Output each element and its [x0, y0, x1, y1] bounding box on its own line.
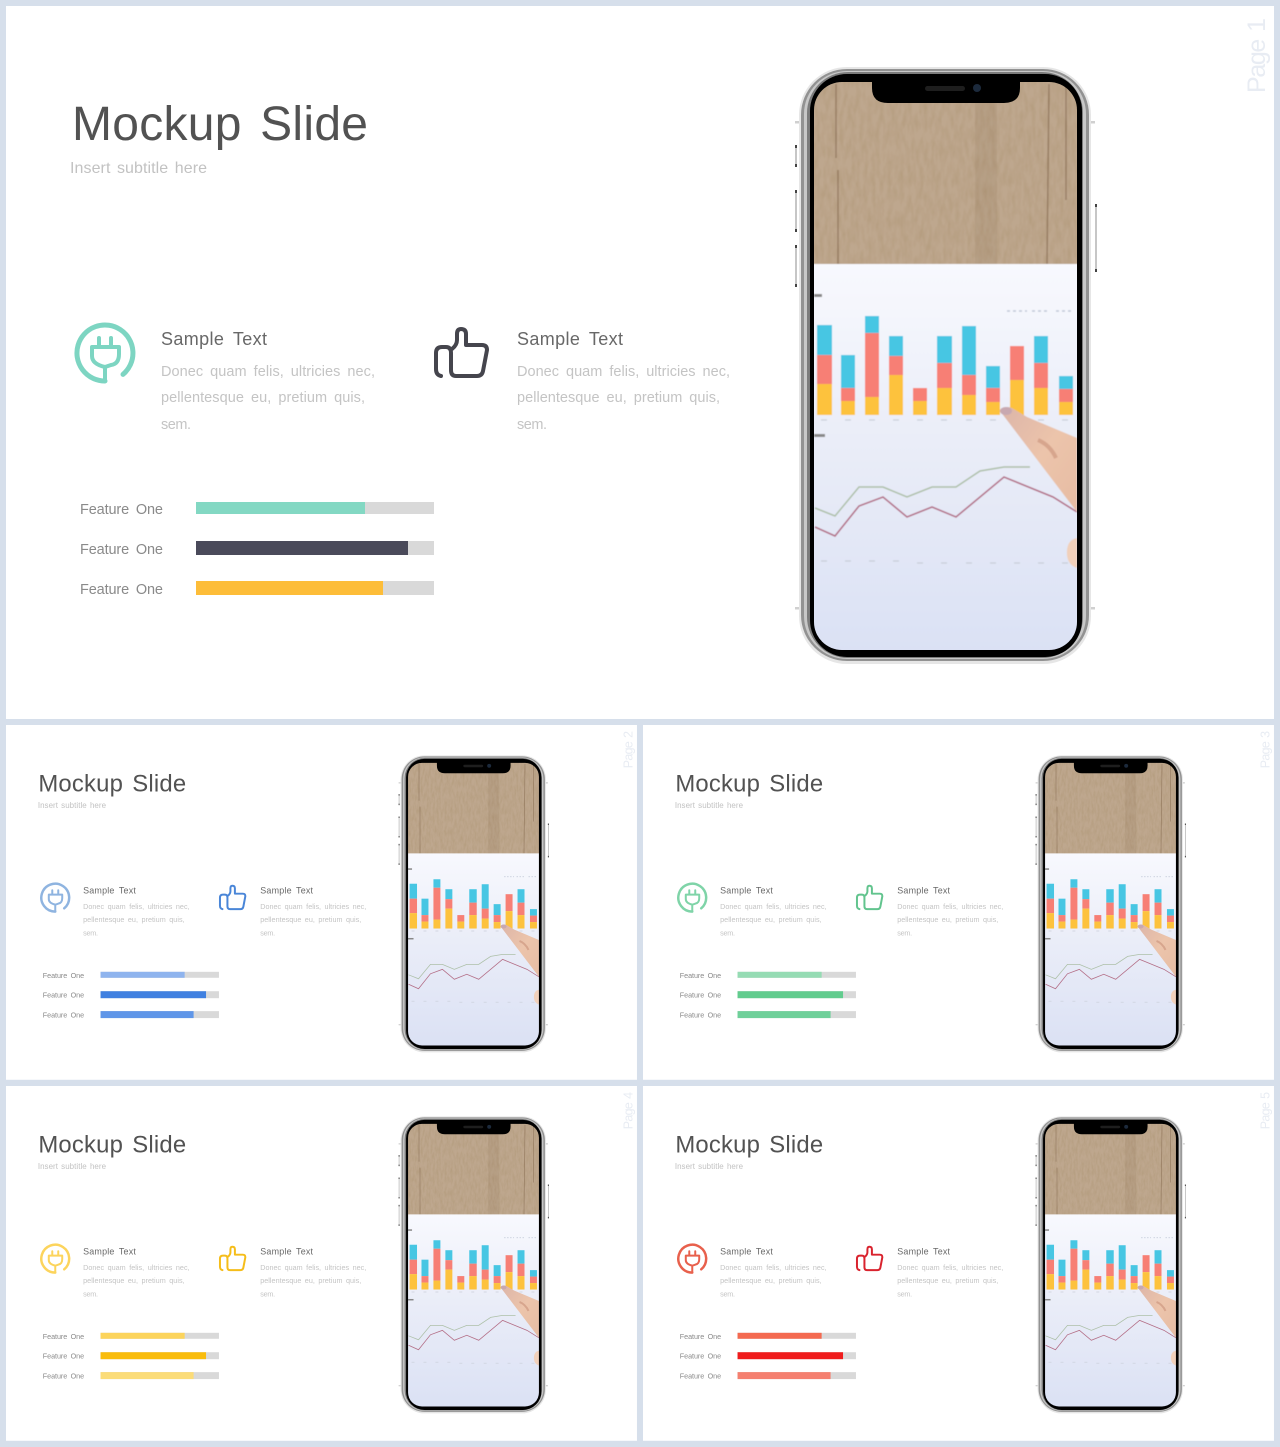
text block: left sample: Sample Text: [83, 886, 136, 896]
text block: left sample: Sample Text: [83, 1247, 136, 1257]
text block: left sample: sem.: [83, 928, 98, 937]
page number: Page 2: [621, 731, 635, 768]
feature bars: Feature One: [43, 1011, 84, 1020]
text block: left sample: [720, 1247, 827, 1298]
subtitle: Insert subtitle here: [70, 160, 207, 177]
phone mockup: [399, 755, 548, 1052]
text block: left sample: Donec quam felis, ultricies nec,: [83, 1263, 190, 1272]
title: Mockup Slide: [38, 771, 186, 798]
feature bars: Feature One: [680, 1372, 721, 1381]
icon: plug: [678, 884, 706, 912]
feature bars: Feature One: [680, 1332, 721, 1341]
text block: left sample: sem.: [720, 928, 735, 937]
text block: right sample: [517, 329, 730, 433]
text block: right sample: pellentesque eu, pretium quis,: [897, 915, 998, 924]
icon: thumbs up: [857, 1247, 882, 1270]
title: Mockup Slide: [38, 1132, 186, 1159]
icon: plug: [41, 1245, 69, 1273]
text block: right sample: pellentesque eu, pretium quis,: [260, 1276, 361, 1285]
icon: thumbs up: [436, 329, 487, 376]
text block: right sample: pellentesque eu, pretium quis,: [517, 390, 720, 406]
text block: left sample: pellentesque eu, pretium quis,: [161, 390, 365, 406]
text block: left sample: pellentesque eu, pretium quis,: [720, 915, 822, 924]
feature bars: Feature One: [680, 1011, 721, 1020]
icon: plug: [678, 1245, 706, 1273]
subtitle: Insert subtitle here: [38, 801, 107, 810]
subtitle: Insert subtitle here: [675, 1162, 744, 1171]
text block: right sample: sem.: [897, 1289, 912, 1298]
phone mockup: [795, 67, 1096, 664]
text block: right sample: [897, 1247, 1003, 1298]
title: Mockup Slide: [675, 1132, 823, 1159]
text block: right sample: sem.: [897, 928, 912, 937]
text block: right sample: [260, 886, 366, 937]
text block: left sample: [720, 886, 827, 937]
text block: right sample: sem.: [260, 1289, 275, 1298]
panel: main slide, teal and navy: [6, 6, 1274, 719]
icon: plug: [77, 325, 133, 381]
page number: Page 1: [1243, 18, 1271, 93]
feature bars: Feature One: [43, 971, 84, 980]
icon: thumbs up: [220, 1247, 245, 1270]
feature bars: Feature One: [80, 542, 163, 558]
feature bars: Feature One: [680, 991, 721, 1000]
phone mockup: [1036, 1116, 1185, 1413]
feature bars: [680, 1332, 856, 1381]
text block: right sample: Sample Text: [517, 329, 623, 349]
text block: left sample: Sample Text: [161, 329, 267, 349]
text block: right sample: sem.: [260, 928, 275, 937]
phone mockup: [1036, 755, 1185, 1052]
feature bars: Feature One: [43, 1332, 84, 1341]
text block: right sample: Donec quam felis, ultricies nec,: [897, 1263, 1003, 1272]
feature bars: Feature One: [80, 502, 163, 518]
text block: left sample: Sample Text: [720, 1247, 773, 1257]
feature bars: Feature One: [43, 991, 84, 1000]
icon: plug: [41, 884, 69, 912]
feature bars: [43, 1332, 219, 1381]
text block: right sample: [260, 1247, 366, 1298]
page number: Page 4: [621, 1092, 635, 1129]
title: Mockup Slide: [72, 98, 368, 151]
text block: right sample: Donec quam felis, ultricies nec,: [517, 364, 730, 380]
text block: left sample: [83, 886, 190, 937]
feature bars: [680, 971, 856, 1020]
feature bars: Feature One: [43, 1352, 84, 1361]
panel: blue slide: [6, 725, 637, 1080]
text block: right sample: [897, 886, 1003, 937]
text block: right sample: pellentesque eu, pretium quis,: [260, 915, 361, 924]
text block: left sample: pellentesque eu, pretium quis,: [83, 1276, 185, 1285]
text block: right sample: Sample Text: [897, 886, 951, 896]
icon: thumbs up: [220, 886, 245, 909]
text block: right sample: Sample Text: [260, 886, 314, 896]
subtitle: Insert subtitle here: [675, 801, 744, 810]
title: Mockup Slide: [675, 771, 823, 798]
feature bars: [43, 971, 219, 1020]
text block: left sample: Donec quam felis, ultricies nec,: [720, 1263, 827, 1272]
phone mockup: [399, 1116, 548, 1413]
feature bars: Feature One: [680, 1352, 721, 1361]
text block: left sample: pellentesque eu, pretium quis,: [720, 1276, 822, 1285]
text block: left sample: Donec quam felis, ultricies nec,: [161, 364, 375, 380]
panel: yellow slide: [6, 1086, 637, 1441]
text block: left sample: Sample Text: [720, 886, 773, 896]
page number: Page 3: [1258, 731, 1272, 768]
panel: red slide: [643, 1086, 1274, 1441]
panel: green slide: [643, 725, 1274, 1080]
text block: left sample: sem.: [161, 417, 191, 433]
feature bars: Feature One: [680, 971, 721, 980]
text block: right sample: Donec quam felis, ultricies nec,: [260, 902, 366, 911]
icon: thumbs up: [857, 886, 882, 909]
text block: left sample: [161, 329, 375, 433]
text block: right sample: Donec quam felis, ultricies nec,: [260, 1263, 366, 1272]
text block: left sample: sem.: [720, 1289, 735, 1298]
text block: right sample: Sample Text: [260, 1247, 314, 1257]
text block: left sample: Donec quam felis, ultricies nec,: [720, 902, 827, 911]
text block: right sample: Sample Text: [897, 1247, 951, 1257]
feature bars: [80, 502, 434, 598]
text block: right sample: Donec quam felis, ultricies nec,: [897, 902, 1003, 911]
text block: left sample: pellentesque eu, pretium quis,: [83, 915, 185, 924]
feature bars: Feature One: [43, 1372, 84, 1381]
page number: Page 5: [1258, 1092, 1272, 1129]
text block: left sample: [83, 1247, 190, 1298]
subtitle: Insert subtitle here: [38, 1162, 107, 1171]
text block: left sample: Donec quam felis, ultricies nec,: [83, 902, 190, 911]
text block: right sample: sem.: [517, 417, 547, 433]
text block: left sample: sem.: [83, 1289, 98, 1298]
text block: right sample: pellentesque eu, pretium quis,: [897, 1276, 998, 1285]
feature bars: Feature One: [80, 582, 163, 598]
